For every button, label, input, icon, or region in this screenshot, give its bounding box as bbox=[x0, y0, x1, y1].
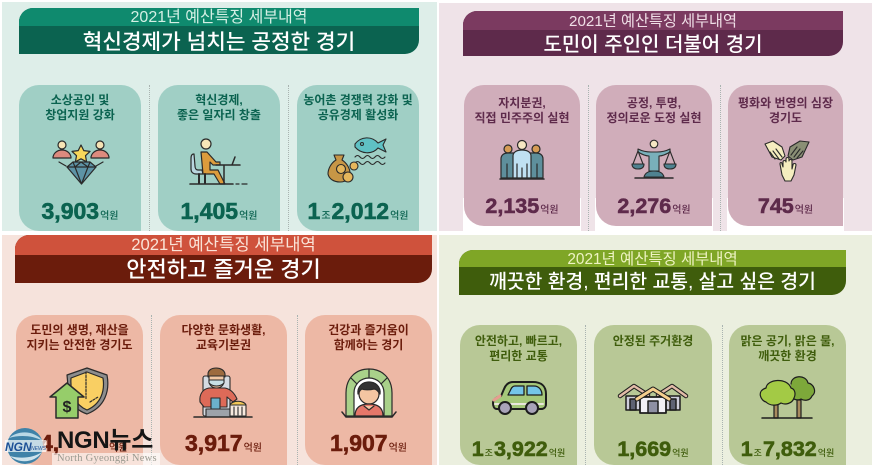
header banner: safe and joyful: 안전하고 즐거운 경기 bbox=[126, 257, 321, 282]
card: rural competitiveness: 농어촌 경쟁력 강화 및 bbox=[303, 93, 413, 107]
amount: 3,917억원 bbox=[185, 430, 262, 456]
icon: shield and house bbox=[49, 367, 108, 419]
card: fairness bbox=[596, 85, 712, 226]
card: rural competitiveness: 공유경제 활성화 bbox=[318, 108, 398, 122]
icon: seated person with building bbox=[193, 368, 253, 418]
logo globe: NEWS bbox=[31, 446, 47, 452]
card: public safety: 지키는 안전한 경기도 bbox=[26, 338, 133, 352]
card: small business support: 창업지원 강화 bbox=[45, 108, 115, 122]
icon: child in arched window bbox=[341, 368, 397, 418]
card: innovation jobs bbox=[158, 85, 280, 231]
logo wordmark: NGN뉴스 bbox=[57, 427, 153, 454]
logo globe: NGN bbox=[5, 440, 32, 454]
icon: van bbox=[492, 381, 547, 415]
amount: 2,135억원 bbox=[485, 194, 559, 218]
card: housing: 안정된 주거환경 bbox=[613, 334, 693, 348]
card: fairness: 공정, 투명, bbox=[627, 96, 681, 110]
icon: person working at desk bbox=[189, 138, 248, 185]
card: health and joy: 건강과 즐거움이 bbox=[328, 323, 409, 337]
amount: 1조7,832억원 bbox=[741, 437, 834, 461]
header banner: clean environment: 깨끗한 환경, 편리한 교통, 살고 싶은 경기 bbox=[489, 272, 816, 293]
panel: innovation economy bbox=[2, 2, 437, 231]
watermark: NGN news logo bbox=[5, 427, 160, 465]
icon: shield and house: $ bbox=[63, 399, 72, 416]
header banner: co-prosperity: 도민이 주인인 더불어 경기 bbox=[543, 34, 763, 56]
card: peace and prosperity: 경기도 bbox=[769, 111, 802, 125]
icon: trees bbox=[760, 376, 816, 419]
card: transport bbox=[460, 325, 577, 465]
card: clean air and water: 깨끗한 환경 bbox=[758, 349, 817, 363]
panel: co-prosperity bbox=[439, 3, 872, 231]
header banner: clean environment bbox=[459, 250, 846, 295]
card: transport: 안전하고, 빠르고, bbox=[475, 334, 562, 348]
card: innovation jobs: 좋은 일자리 창출 bbox=[177, 108, 261, 122]
amount: 1,405억원 bbox=[181, 198, 257, 224]
card: culture and education bbox=[160, 315, 287, 465]
header banner: co-prosperity bbox=[463, 11, 843, 56]
card: transport: 편리한 교통 bbox=[489, 349, 548, 363]
card: fairness: 정의로운 도정 실현 bbox=[606, 111, 702, 125]
card: health and joy: 함께하는 경기 bbox=[334, 338, 403, 352]
card: self-governance: 직접 민주주의 실현 bbox=[474, 111, 570, 125]
card: clean air and water: 맑은 공기, 맑은 물, bbox=[741, 334, 834, 348]
card: health and joy bbox=[305, 315, 432, 465]
card: self-governance bbox=[464, 85, 580, 226]
icon: group of people bbox=[499, 140, 545, 180]
icon: three hands bbox=[764, 140, 810, 182]
amount: 3,903억원 bbox=[42, 198, 118, 224]
card: culture and education: 다양한 문화생활, bbox=[182, 323, 265, 337]
panel: clean environment bbox=[439, 235, 872, 465]
card: public safety: 도민의 생명, 재산을 bbox=[30, 323, 129, 337]
card: self-governance: 자치분권, bbox=[498, 96, 546, 110]
card: culture and education: 교육기본권 bbox=[196, 338, 251, 352]
header banner: co-prosperity: 2021년 예산특징 세부내역 bbox=[569, 13, 737, 30]
amount: 1조3,922억원 bbox=[472, 437, 565, 461]
card: small business support bbox=[19, 85, 141, 231]
amount, partly hidden by the watermark: 4, bbox=[40, 430, 59, 456]
logo globe bbox=[5, 428, 47, 464]
panel: safe and joyful bbox=[2, 235, 437, 465]
amount: 2,276억원 bbox=[617, 194, 691, 218]
amount: 1,669억원 bbox=[617, 437, 689, 461]
amount: 1조2,012억원 bbox=[308, 198, 408, 224]
card: small business support: 소상공인 및 bbox=[51, 93, 109, 107]
icon: scales of justice bbox=[631, 140, 677, 179]
card: clean air and water bbox=[729, 325, 846, 465]
icon: fish and money bag bbox=[327, 137, 386, 182]
card: housing bbox=[594, 325, 712, 465]
header banner: clean environment: 2021년 예산특징 세부내역 bbox=[567, 251, 738, 268]
amount: 1,907억원 bbox=[330, 430, 407, 456]
header banner: innovation economy bbox=[19, 8, 419, 54]
card: rural competitiveness bbox=[297, 85, 419, 231]
logo tagline: North Gyeonggi News bbox=[57, 453, 157, 464]
icon: people, star and diamond bbox=[52, 140, 110, 185]
card: public safety bbox=[16, 315, 143, 465]
header banner: safe and joyful: 2021년 예산특징 세부내역 bbox=[131, 235, 316, 254]
icon: three houses bbox=[618, 384, 688, 414]
amount unit: 억원 bbox=[109, 443, 127, 454]
header banner: innovation economy: 2021년 예산특징 세부내역 bbox=[131, 9, 307, 26]
header banner: safe and joyful bbox=[15, 235, 432, 283]
header banner: innovation economy: 혁신경제가 넘치는 공정한 경기 bbox=[83, 30, 355, 54]
amount: 745억원 bbox=[758, 194, 813, 218]
card: peace and prosperity: 평화와 번영의 심장 bbox=[738, 96, 833, 110]
card: innovation jobs: 혁신경제, bbox=[195, 93, 243, 107]
card: peace and prosperity bbox=[728, 85, 843, 226]
